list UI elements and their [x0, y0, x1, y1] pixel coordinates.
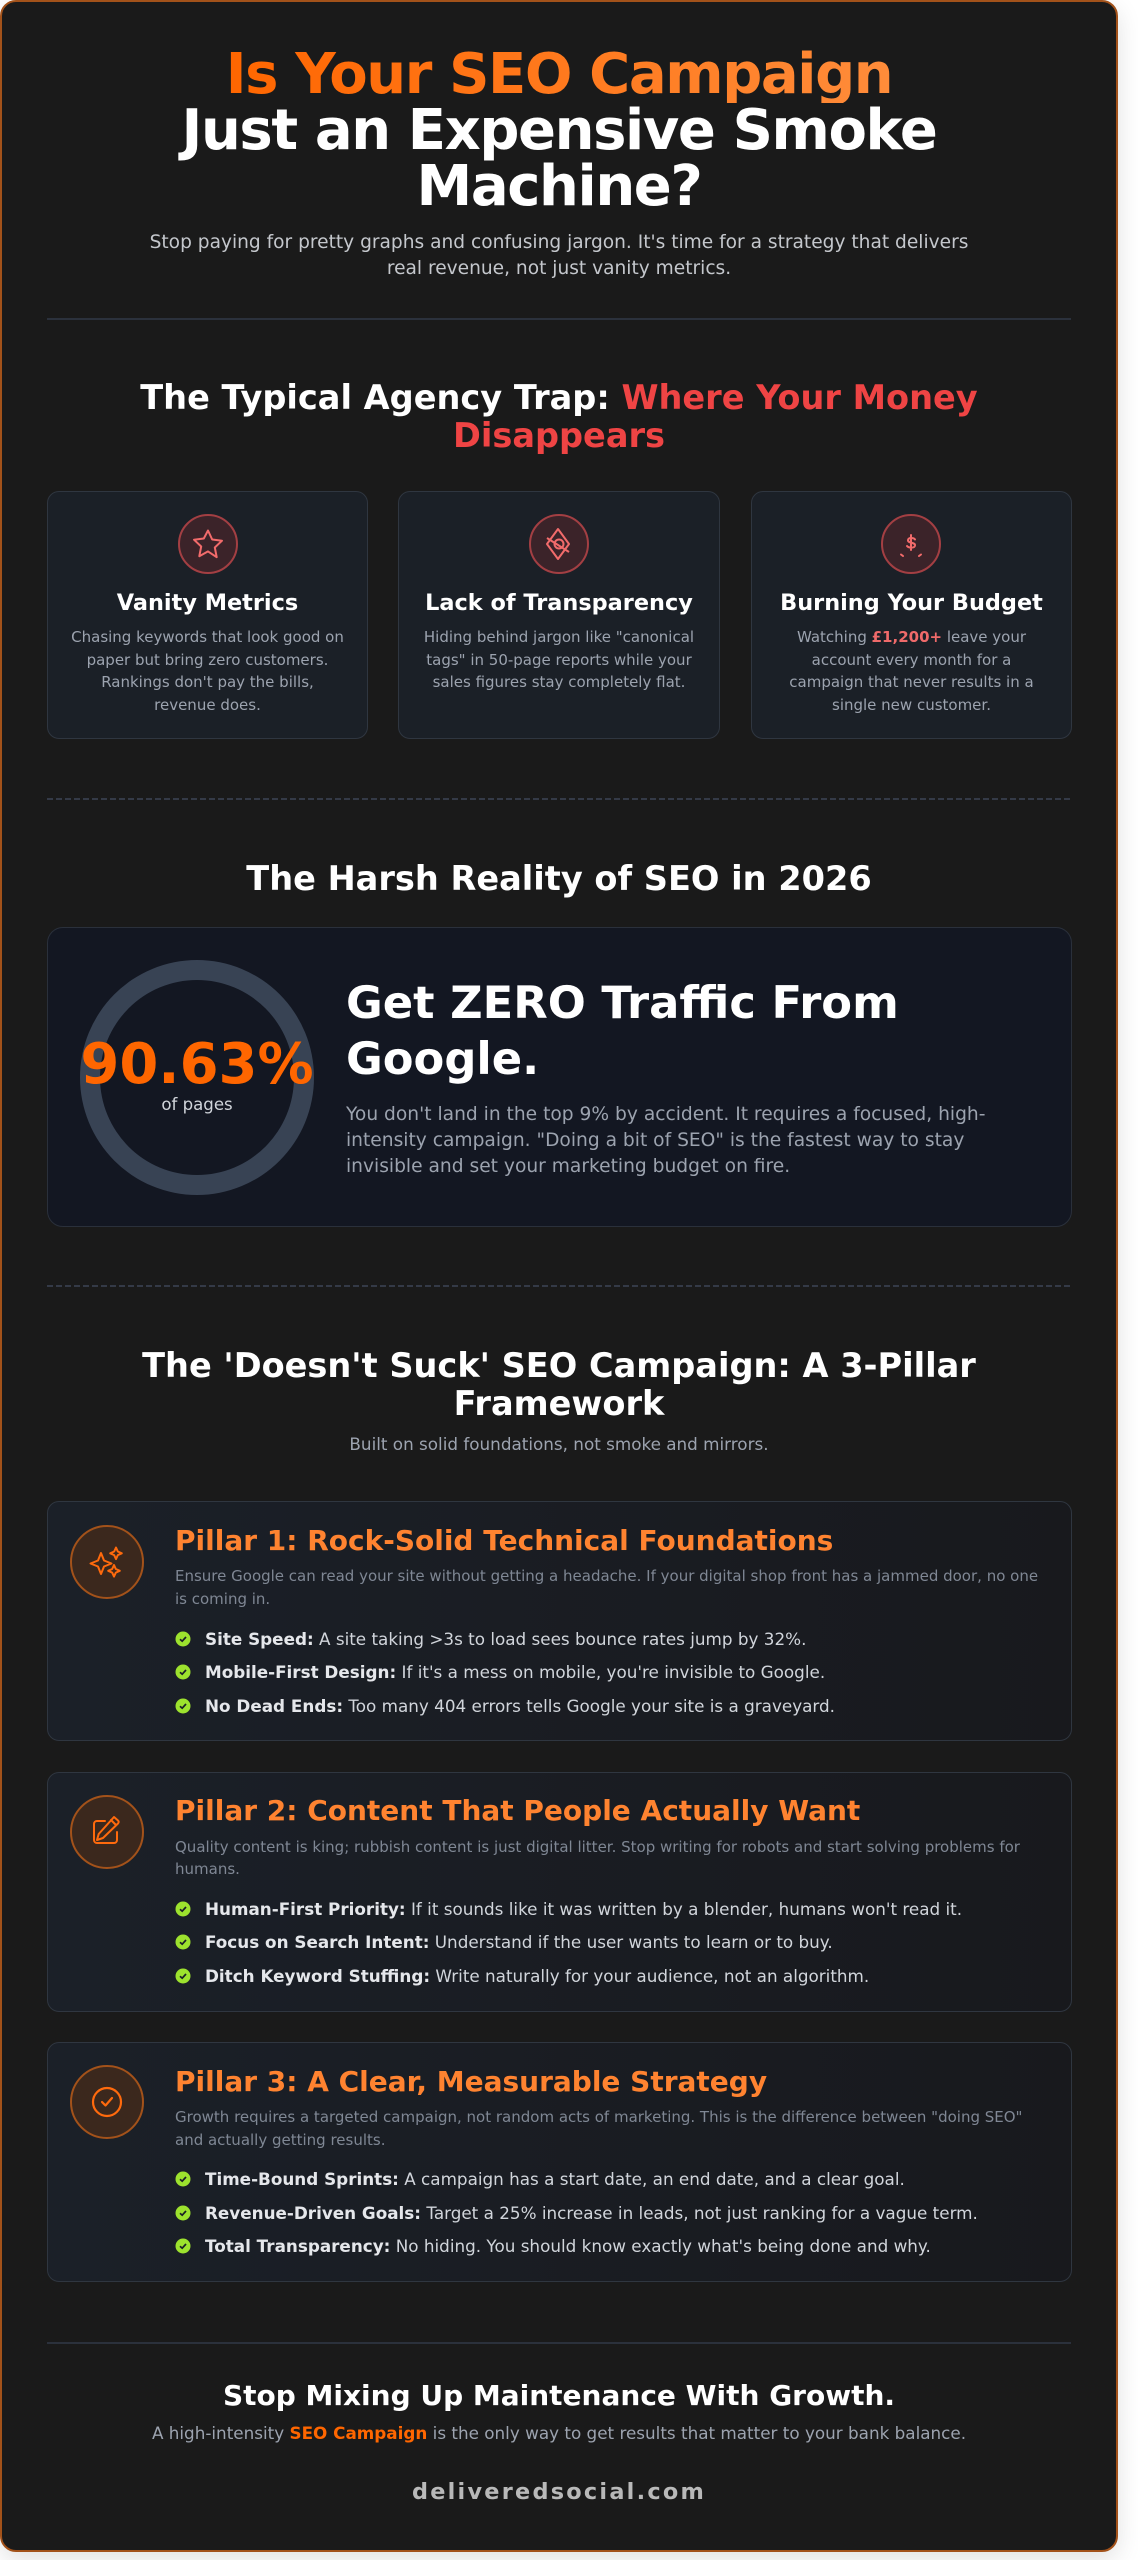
pillar text	[175, 1567, 1038, 1608]
checklist item: Focus on Search Intent: Understand if the user wants to learn or to buy.	[205, 1932, 833, 1952]
checklist item: Site Speed: A site taking >3s to load sees bounce rates jump by 32%.	[205, 1629, 806, 1649]
card text: campaign that never results in a	[789, 673, 1034, 691]
card: vanity metrics	[47, 491, 368, 739]
subtitle	[150, 232, 968, 279]
card text: revenue does.	[154, 696, 261, 714]
framework subtitle: Built on solid foundations, not smoke and mirrors.	[349, 1434, 769, 1454]
stat heading: Google.	[346, 1032, 539, 1085]
checklist item: Total Transparency: No hiding. You should know exactly what's being done and why.	[205, 2236, 931, 2256]
heading: framework	[142, 1346, 976, 1423]
icon: star	[178, 514, 238, 574]
checklist item: No Dead Ends: Too many 404 errors tells Google your site is a graveyard.	[205, 1696, 835, 1716]
pillar title: Pillar 1: Rock-Solid Technical Foundations	[175, 1524, 833, 1557]
heading: agency trap: The Typical Agency Trap: Where Your Money	[140, 378, 978, 417]
statistic value: 90.63%	[80, 1032, 314, 1097]
title: Just an Expensive Smoke	[182, 98, 936, 163]
footer heading: Stop Mixing Up Maintenance With Growth.	[223, 2379, 895, 2412]
card text: tags" in 50-page reports while your	[426, 650, 692, 668]
stat text: intensity campaign. "Doing a bit of SEO" is the fastest way to stay	[346, 1130, 964, 1151]
card title: Lack of Transparency	[425, 590, 693, 616]
stat text: invisible and set your marketing budget on fire.	[346, 1156, 790, 1177]
stat text: You don't land in the top 9% by accident. It requires a focused, high-	[346, 1104, 985, 1125]
heading: agency trap	[140, 378, 978, 455]
checklist item: Human-First Priority: If it sounds like it was written by a blender, humans won't read it.	[205, 1899, 962, 1919]
panel: pillar 2	[47, 1772, 1072, 2012]
card title: Burning Your Budget	[780, 590, 1043, 616]
subtitle: real revenue, not just vanity metrics.	[387, 258, 731, 279]
pillar text	[175, 2108, 1022, 2148]
card text: Hiding behind jargon like "canonical	[424, 628, 694, 646]
donut ring	[80, 960, 314, 1195]
checklist item: Revenue-Driven Goals: Target a 25% increase in leads, not just ranking for a vague term.	[205, 2203, 978, 2223]
icon: check circle	[70, 2065, 144, 2139]
panel: pillar 1	[47, 1501, 1072, 1741]
checklist item: Ditch Keyword Stuffing: Write naturally for your audience, not an algorithm.	[205, 1966, 869, 1986]
pillar text: Quality content is king; rubbish content is just digital litter. Stop writing for robots and start solving problems for	[175, 1838, 1020, 1856]
pillar text	[175, 1838, 1020, 1878]
checklist item: Time-Bound Sprints: A campaign has a start date, an end date, and a clear goal.	[205, 2169, 905, 2189]
card text: Watching £1,200+ leave your	[797, 628, 1026, 646]
card text: account every month for a	[812, 650, 1011, 668]
pillar text: humans.	[175, 1860, 240, 1878]
pillar title: Pillar 3: A Clear, Measurable Strategy	[175, 2065, 767, 2098]
title: Is Your SEO Campaign	[226, 42, 892, 107]
stat heading	[346, 976, 899, 1085]
icon: sparkles	[70, 1525, 144, 1599]
card text: Rankings don't pay the bills,	[101, 673, 314, 691]
footer website: deliveredsocial.com	[412, 2479, 706, 2505]
panel: statistic	[47, 927, 1072, 1227]
icon: pencil square	[70, 1795, 144, 1869]
heading: harsh reality: The Harsh Reality of SEO in 2026	[246, 859, 872, 898]
card text: Chasing keywords that look good on	[71, 628, 344, 646]
pillar text: Ensure Google can read your site without getting a headache. If your digital shop front has a jammed door, no one	[175, 1567, 1038, 1585]
card text: paper but bring zero customers.	[87, 650, 328, 668]
stat text	[346, 1104, 985, 1177]
icon: crossed eye diamond	[529, 514, 589, 574]
subtitle: Stop paying for pretty graphs and confusing jargon. It's time for a strategy that delivers	[150, 232, 968, 253]
card title: Vanity Metrics	[117, 590, 298, 616]
card text	[424, 628, 694, 691]
pillar text: Growth requires a targeted campaign, not random acts of marketing. This is the difference between "doing SEO"	[175, 2108, 1022, 2126]
checklist item: Mobile-First Design: If it's a mess on mobile, you're invisible to Google.	[205, 1662, 825, 1682]
icon: burning dollar	[880, 514, 940, 574]
pillar text: and actually getting results.	[175, 2130, 385, 2148]
heading: framework: The 'Doesn't Suck' SEO Campaign: A 3-Pillar	[142, 1346, 976, 1385]
title	[178, 42, 936, 219]
statistic caption: of pages	[161, 1095, 233, 1114]
card: burning budget	[751, 491, 1072, 739]
card text	[789, 628, 1034, 714]
card text: single new customer.	[832, 696, 991, 714]
heading: agency trap: Disappears	[453, 416, 665, 455]
pillar text: is coming in.	[175, 1590, 270, 1608]
title: Machine?	[417, 154, 701, 219]
stat heading: Get ZERO Traffic From	[346, 976, 899, 1029]
heading: framework: Framework	[454, 1384, 664, 1423]
panel: pillar 3	[47, 2042, 1072, 2282]
footer text: A high-intensity SEO Campaign is the only way to get results that matter to your bank balance.	[152, 2423, 966, 2443]
pillar title: Pillar 2: Content That People Actually Want	[175, 1794, 860, 1827]
card text	[71, 628, 344, 714]
card: lack of transparency	[398, 491, 720, 739]
card text: sales figures stay completely flat.	[433, 673, 685, 691]
